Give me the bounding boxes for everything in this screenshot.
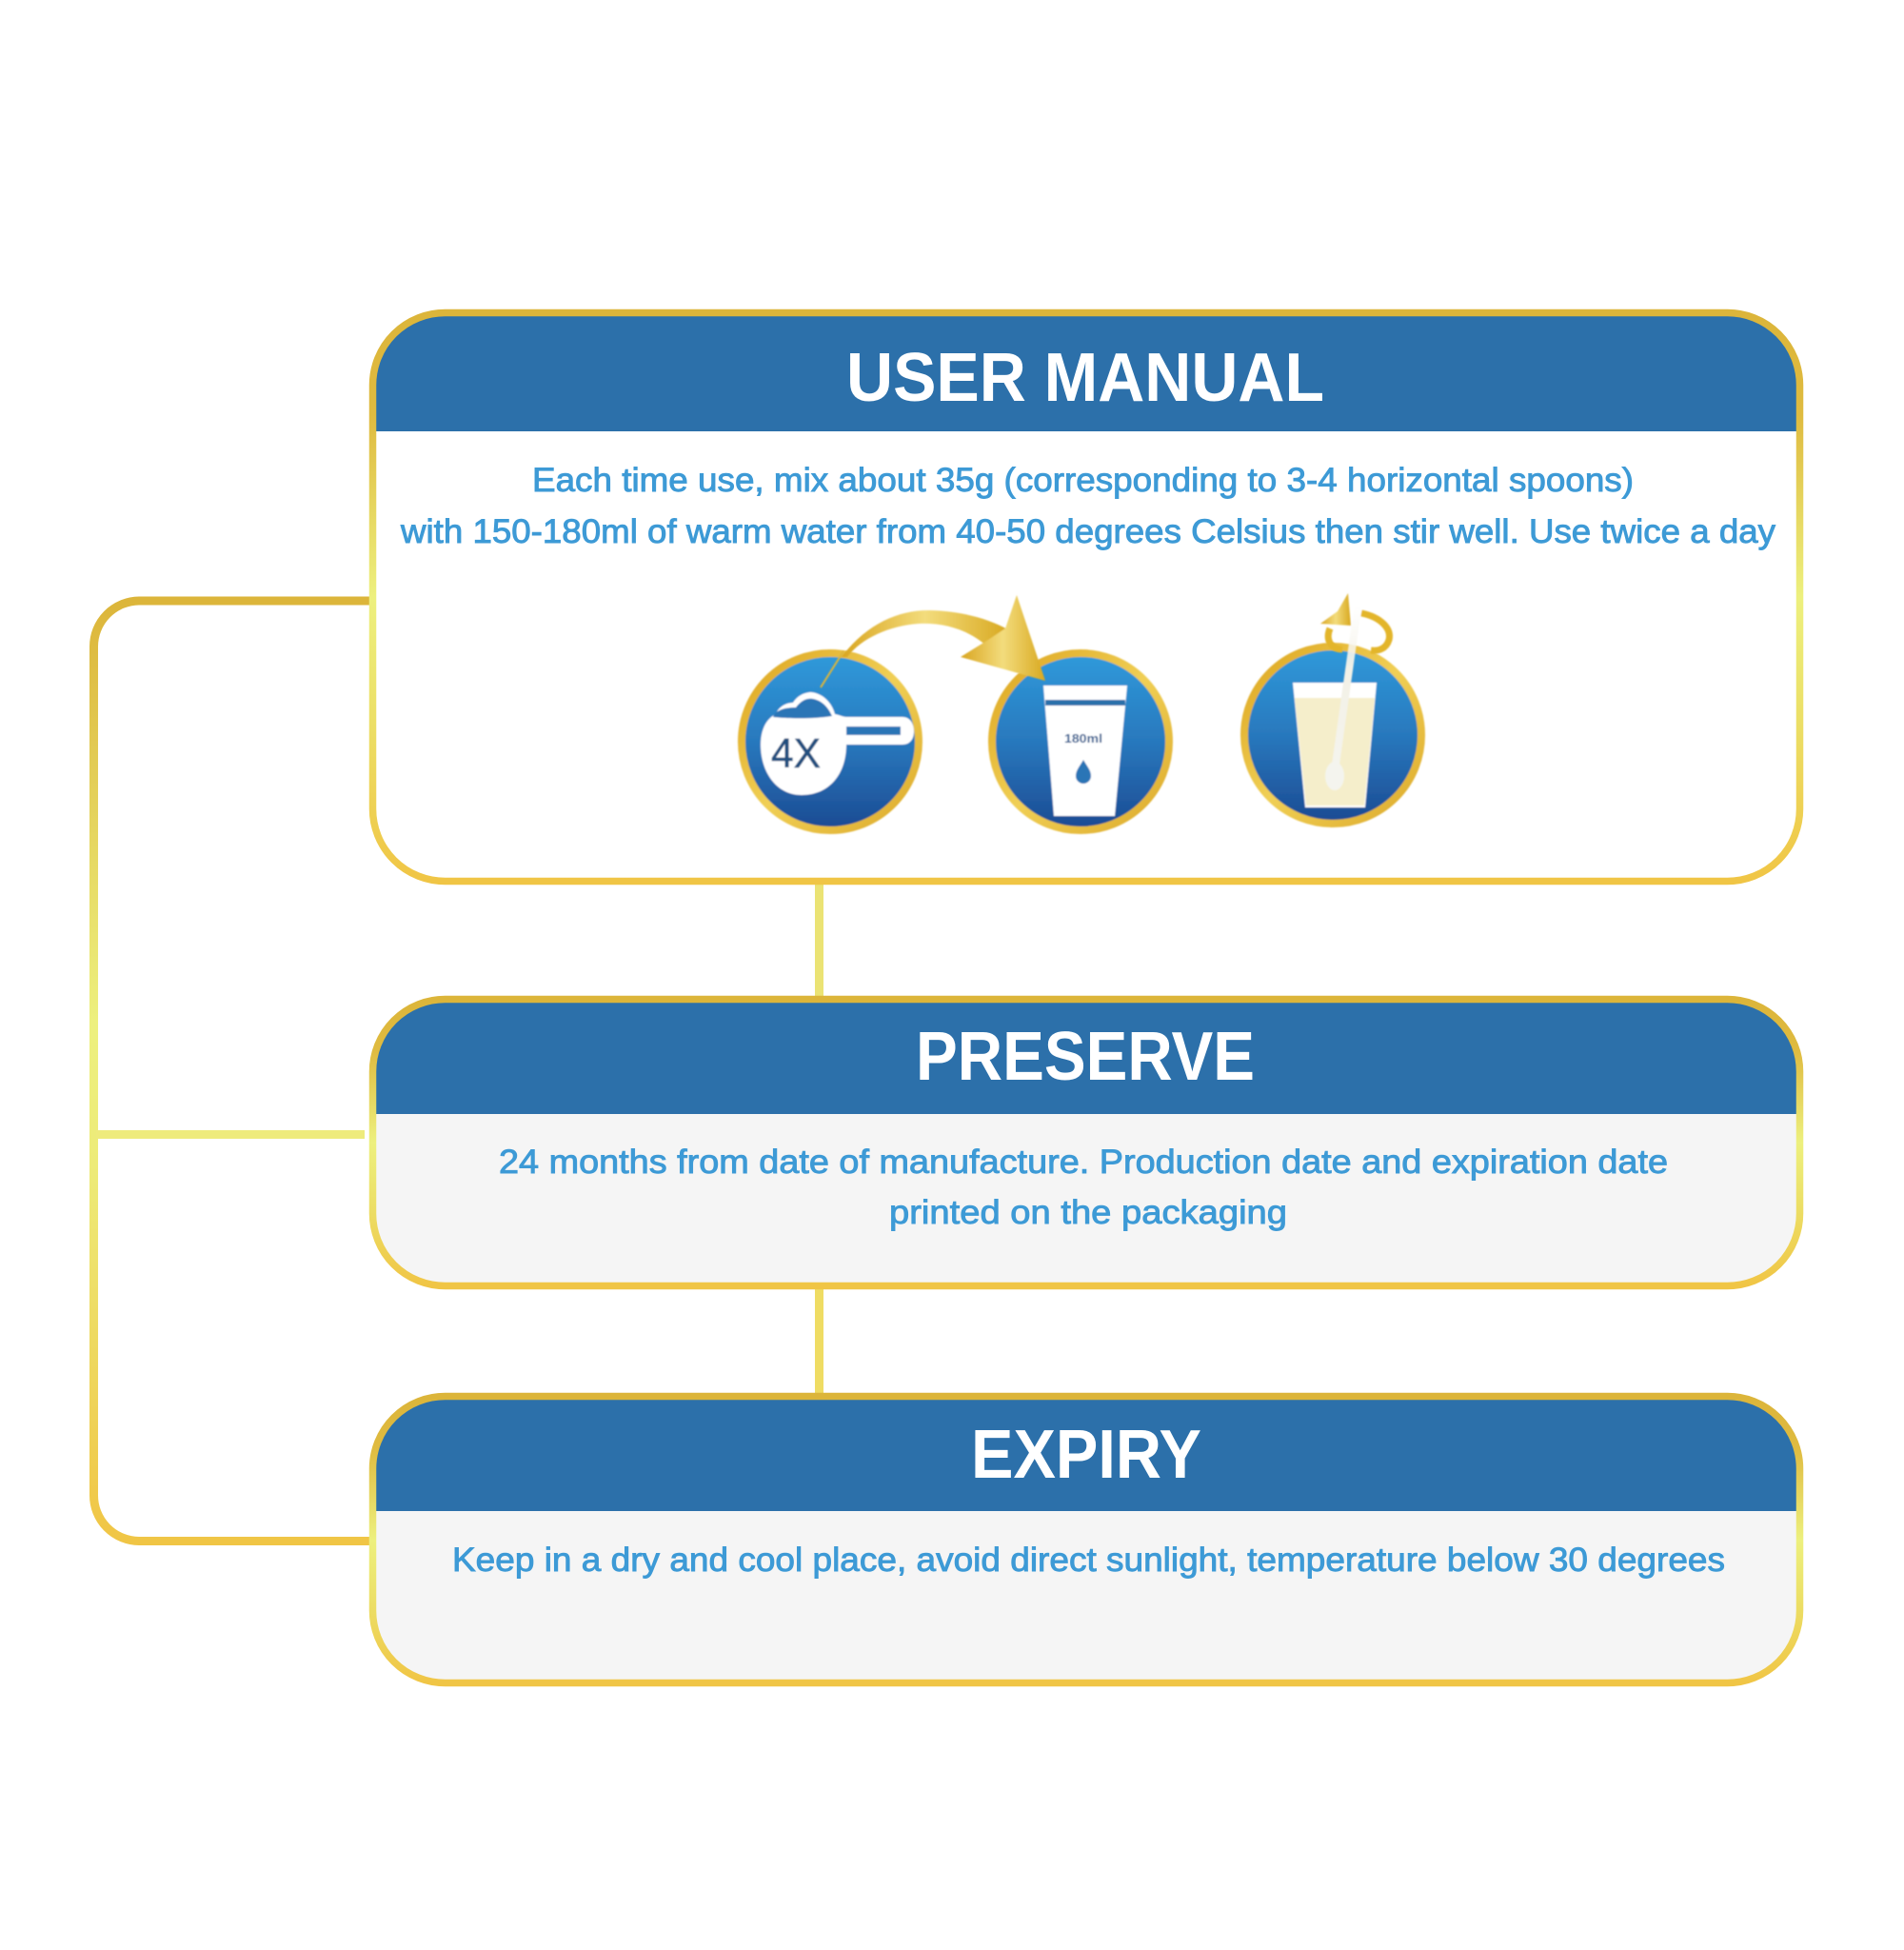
- connector: left bracket linking panels: [93, 601, 369, 1541]
- text block: shelf life: [499, 1144, 1668, 1231]
- icon: glass with spoon: [1244, 647, 1421, 824]
- icon: cup with water: 180ml: [1064, 731, 1102, 746]
- heading: expiry: EXPIRY: [971, 1417, 1201, 1493]
- text block: mixing instructions: Each time use, mix about 35g (corresponding to 3-4 horizontal spoons): [532, 462, 1634, 499]
- arrow: scoop to cup: [821, 595, 1045, 687]
- text block: storage: Keep in a dry and cool place, avoid direct sunlight, temperature below 30 degrees: [452, 1542, 1725, 1579]
- header band: expiry: [373, 1396, 1799, 1511]
- panel: user manual: [373, 312, 1799, 882]
- text block: shelf life: printed on the packaging: [889, 1194, 1287, 1231]
- heading: user manual: USER MANUAL: [846, 340, 1324, 416]
- header band: user manual: [373, 312, 1799, 431]
- text block: mixing instructions: with 150-180ml of warm water from 40-50 degrees Celsius then stir well. Use twice a day: [400, 513, 1776, 550]
- icon: scoop 4X: 4X: [771, 730, 821, 777]
- icon: cup with water: [992, 653, 1169, 830]
- panel: preserve: [373, 1000, 1799, 1285]
- icon: scoop 4X: [742, 653, 919, 830]
- connector: user manual to preserve: [815, 882, 823, 998]
- connector: preserve to expiry: [815, 1287, 823, 1395]
- heading: preserve: PRESERVE: [916, 1019, 1255, 1095]
- header band: preserve: [373, 1000, 1799, 1114]
- text block: mixing instructions: [400, 462, 1776, 550]
- arrow: stirring rotation: [1320, 593, 1389, 790]
- panel: expiry: [373, 1396, 1799, 1683]
- text block: shelf life: 24 months from date of manufacture. Production date and expiration date: [499, 1144, 1668, 1181]
